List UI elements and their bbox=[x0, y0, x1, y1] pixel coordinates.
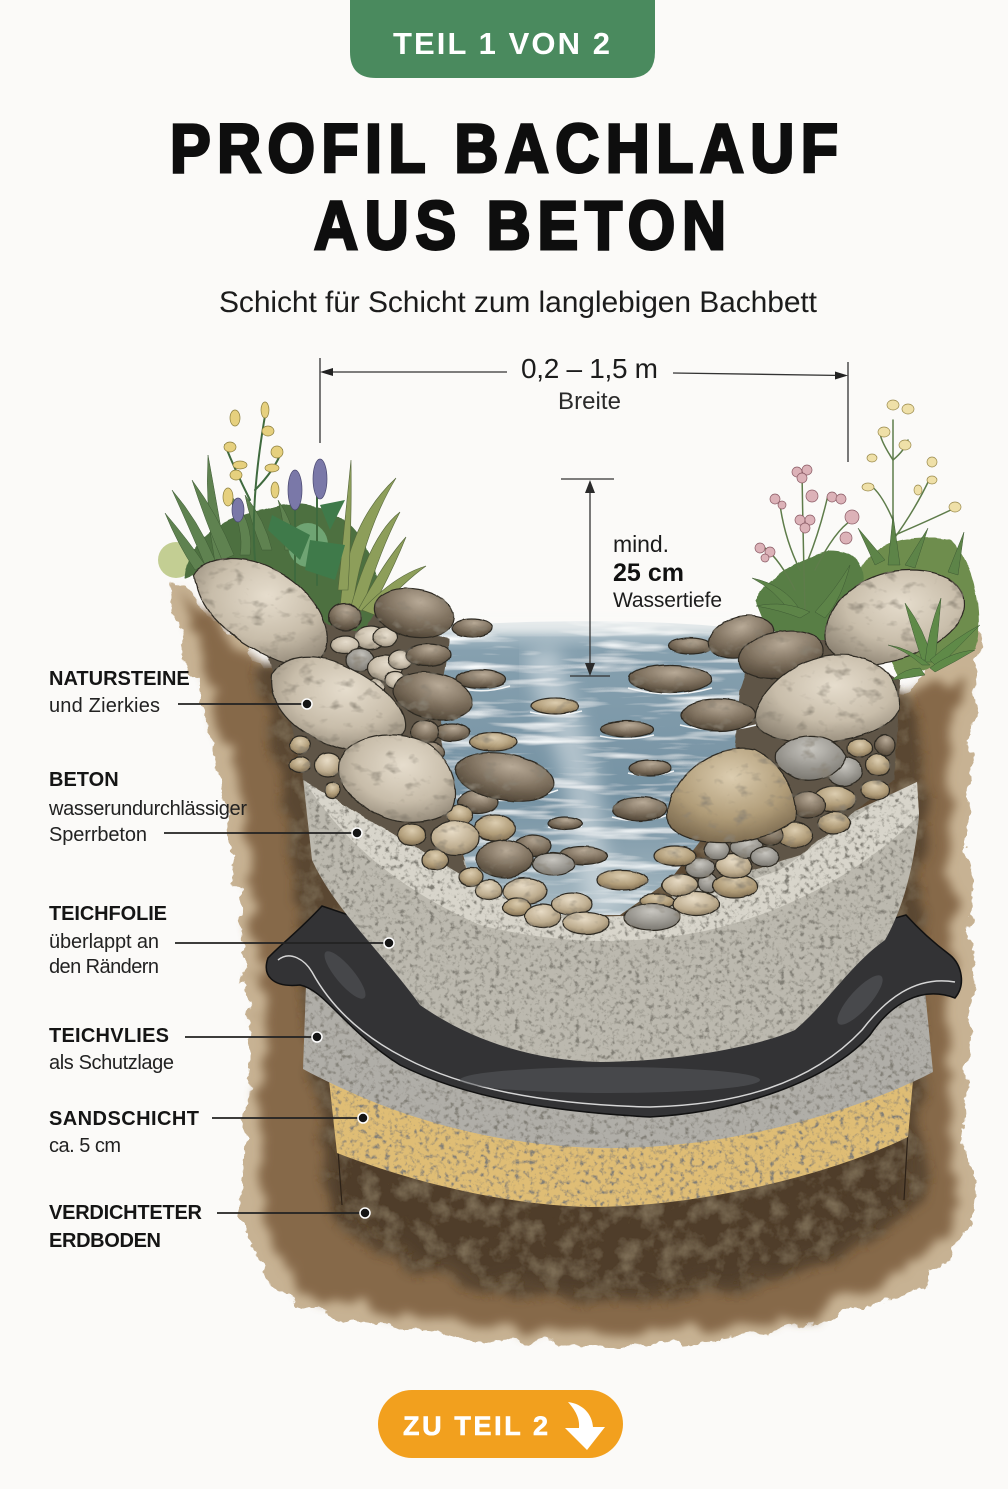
layer: pond liner bbox=[266, 906, 961, 1117]
label: Teichvlies: als Schutzlage bbox=[49, 1052, 174, 1074]
label: Verdichteter Erdboden: ERDBODEN bbox=[49, 1230, 161, 1252]
title: PROFIL BACHLAUF bbox=[170, 110, 838, 187]
title bbox=[170, 110, 838, 264]
dimension: water depth bbox=[561, 479, 722, 676]
stones: small pebbles bbox=[289, 603, 895, 934]
stones: large boulders bbox=[194, 559, 964, 843]
badge: Teil 1 von 2: TEIL 1 VON 2 bbox=[393, 26, 610, 61]
label: Teichfolie: TEICHFOLIE bbox=[49, 903, 167, 925]
title: AUS BETON bbox=[314, 187, 726, 264]
dimension: water depth: mind. bbox=[613, 531, 669, 557]
label: Verdichteter Erdboden: VERDICHTETER bbox=[49, 1202, 203, 1224]
label: Beton: Sperrbeton bbox=[49, 824, 147, 846]
plants right bbox=[752, 400, 979, 680]
label: Teichfolie: den Rändern bbox=[49, 956, 159, 978]
water ripples bbox=[456, 686, 756, 829]
dimension: width bbox=[320, 353, 848, 462]
label: Sandschicht bbox=[49, 1108, 368, 1157]
label: Natursteine bbox=[49, 668, 312, 717]
label: Verdichteter Erdboden bbox=[49, 1202, 370, 1252]
button: Zu Teil 2 bbox=[378, 1390, 623, 1458]
layer: fleece bbox=[303, 985, 933, 1148]
dimension: water depth: Wassertiefe bbox=[613, 589, 722, 612]
water bbox=[425, 612, 770, 915]
dimension: width: 0,2 – 1,5 m bbox=[521, 353, 658, 384]
label: Sandschicht: SANDSCHICHT bbox=[49, 1108, 199, 1130]
plant: tuft over right boulder bbox=[888, 598, 980, 680]
label: Teichfolie: überlappt an bbox=[49, 931, 159, 953]
plants left bbox=[158, 402, 426, 632]
layer: concrete bbox=[303, 778, 919, 1062]
label: Beton: wasserundurchlässiger bbox=[48, 798, 247, 820]
label: Teichvlies bbox=[49, 1025, 322, 1074]
subtitle: Schicht für Schicht zum langlebigen Bachbett bbox=[219, 286, 818, 319]
label: Teichvlies: TEICHVLIES bbox=[49, 1025, 169, 1047]
icon: curved arrow bbox=[565, 1402, 605, 1450]
bank base left bbox=[265, 600, 470, 880]
layer: sand bbox=[329, 1080, 913, 1207]
concrete top lip bbox=[303, 778, 919, 941]
label: Natursteine: NATURSTEINE bbox=[49, 668, 190, 690]
label: Sandschicht: ca. 5 cm bbox=[49, 1135, 121, 1157]
layer: compacted soil bbox=[336, 1130, 908, 1287]
bank base right bbox=[690, 635, 900, 890]
badge: Teil 1 von 2 bbox=[350, 0, 655, 78]
button: Zu Teil 2: ZU TEIL 2 bbox=[403, 1411, 548, 1441]
soil: outer excavation bbox=[165, 578, 982, 1345]
label: Beton bbox=[48, 769, 362, 846]
dimension: width: Breite bbox=[558, 388, 621, 415]
dimension: water depth: 25 cm bbox=[613, 559, 684, 587]
label: Natursteine: und Zierkies bbox=[49, 695, 160, 717]
label: Teichfolie bbox=[49, 903, 394, 978]
label: Beton: BETON bbox=[49, 769, 119, 791]
